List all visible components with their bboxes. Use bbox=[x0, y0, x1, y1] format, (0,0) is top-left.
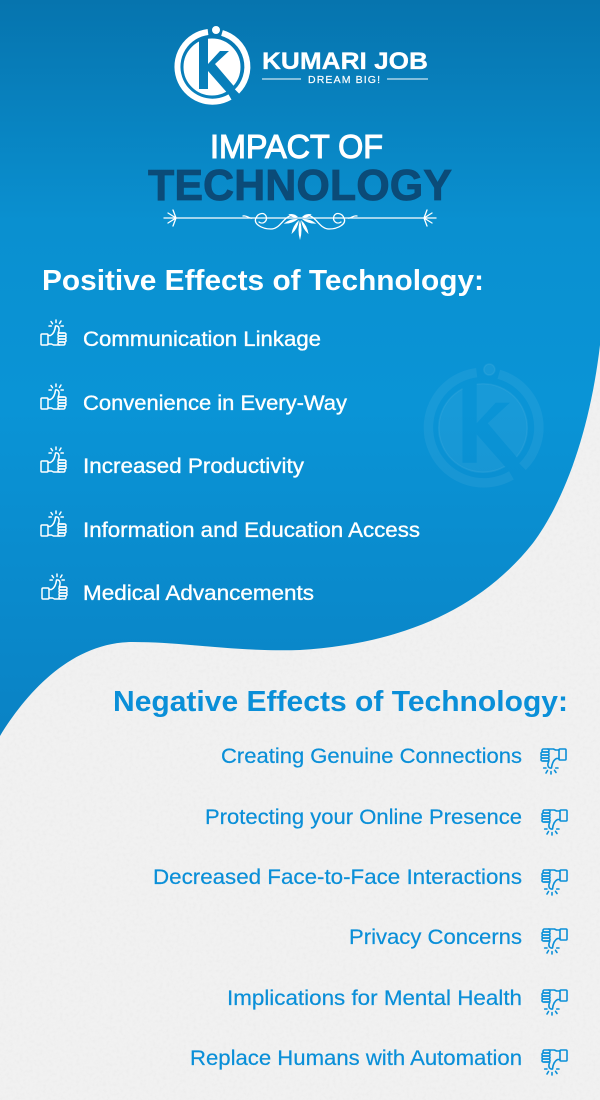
logo tagline: DREAM BIG! bbox=[308, 74, 380, 86]
item 1 bbox=[221, 745, 566, 774]
heading: positive effects: Positive Effects of Technology: bbox=[42, 265, 484, 297]
item 5: Medical Advancements bbox=[83, 582, 314, 605]
positive list bbox=[41, 320, 420, 605]
item 2: Convenience in Every-Way bbox=[83, 392, 348, 415]
item 3: Increased Productivity bbox=[83, 455, 305, 478]
item 1 bbox=[41, 320, 321, 351]
item 3: Decreased Face-to-Face Interactions bbox=[153, 866, 522, 889]
title line 1: IMPACT OF bbox=[210, 128, 383, 165]
blue wave panel bbox=[0, 0, 600, 736]
item 4: Privacy Concerns bbox=[349, 926, 522, 949]
item 1: Creating Genuine Connections bbox=[221, 745, 522, 768]
heading: negative effects: Negative Effects of Technology: bbox=[113, 686, 568, 718]
item 1: Communication Linkage bbox=[83, 328, 321, 351]
item 2 bbox=[205, 806, 567, 835]
item 4 bbox=[349, 926, 567, 954]
item 2: Protecting your Online Presence bbox=[205, 806, 522, 829]
title line 2: TECHNOLOGY bbox=[148, 161, 452, 210]
item 6: Replace Humans with Automation bbox=[190, 1047, 522, 1070]
item 3 bbox=[41, 447, 305, 478]
logo bbox=[177, 26, 428, 102]
item 4 bbox=[41, 511, 420, 542]
logo icon bbox=[177, 26, 247, 102]
item 2 bbox=[41, 384, 348, 415]
item 5 bbox=[42, 574, 314, 605]
ornament divider bbox=[164, 210, 436, 240]
item 4: Information and Education Access bbox=[83, 519, 420, 542]
watermark logo bbox=[428, 364, 539, 483]
item 3 bbox=[153, 866, 567, 895]
negative list bbox=[153, 745, 567, 1075]
item 6 bbox=[190, 1047, 567, 1075]
item 5 bbox=[227, 987, 567, 1015]
item 5: Implications for Mental Health bbox=[227, 987, 522, 1010]
logo wordmark: KUMARI JOB bbox=[262, 48, 428, 75]
